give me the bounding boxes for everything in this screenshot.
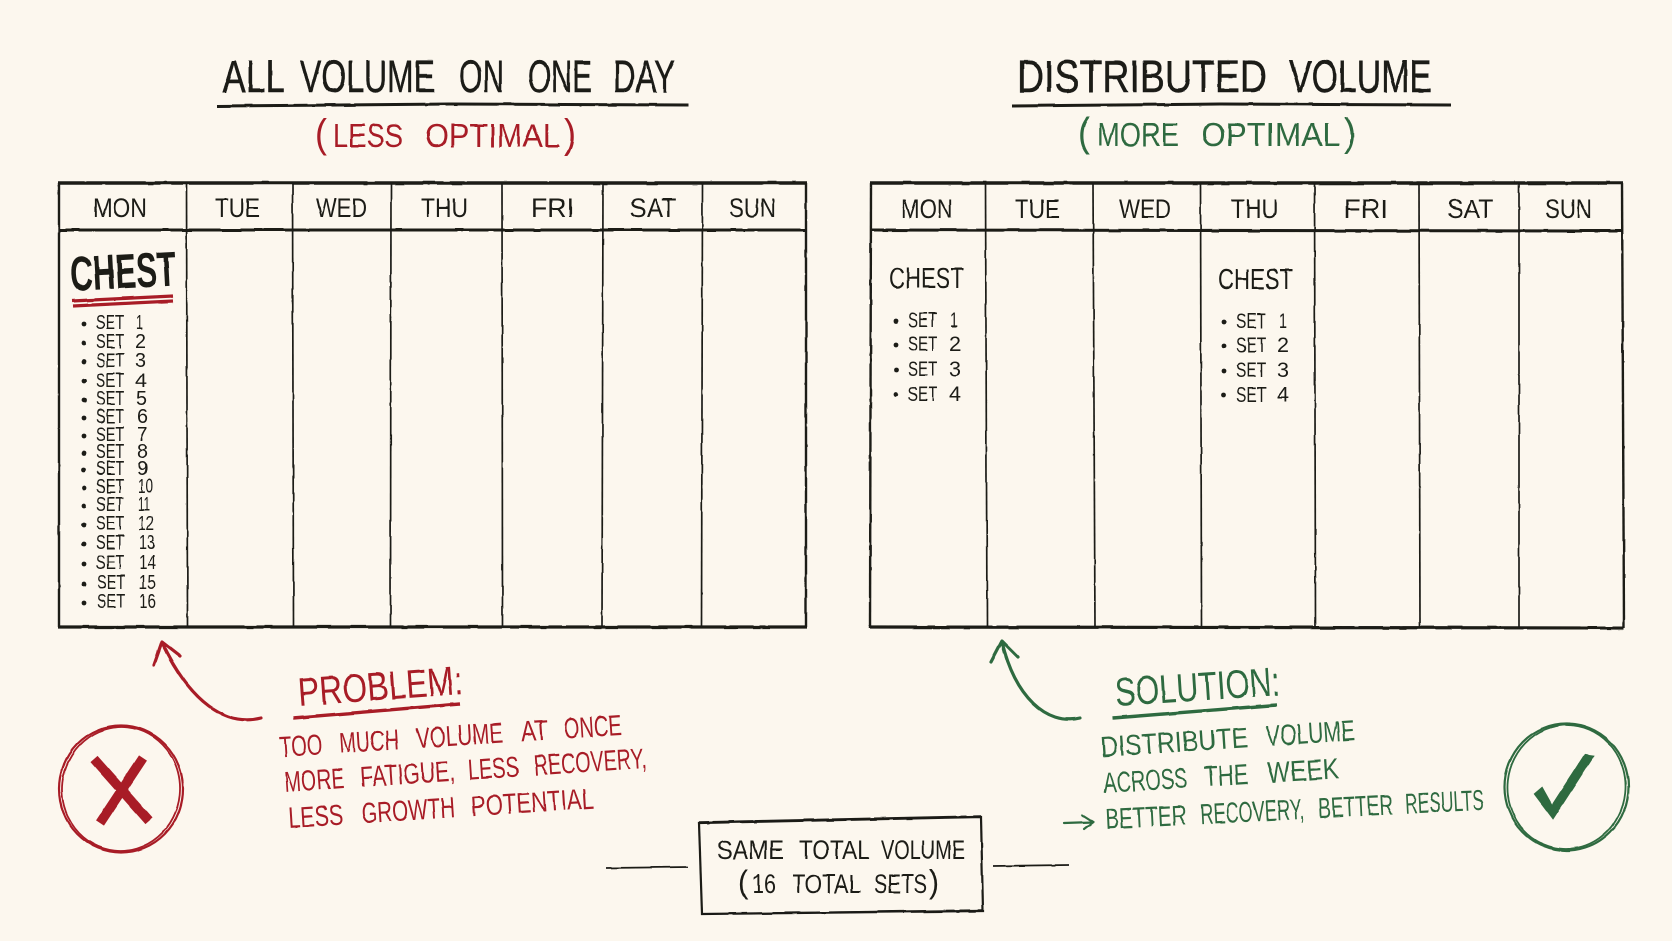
title: all volume on one day: ALL xyxy=(222,51,285,102)
problem text lines: ONCE xyxy=(563,710,623,746)
solution text lines: VOLUME xyxy=(1265,715,1356,753)
monday chest and sets xyxy=(889,263,964,406)
list: sets 1 to 16: 14 xyxy=(139,552,156,574)
list: sets 1 to 16: SET xyxy=(96,331,124,353)
problem text lines xyxy=(278,710,648,835)
callout box: same total volume: SETS xyxy=(874,869,927,899)
list: sets 1 to 16: 6 xyxy=(137,406,148,428)
callout: solution xyxy=(1099,660,1485,836)
day headers: SAT xyxy=(1447,194,1493,224)
thursday chest and sets: 2 xyxy=(1277,334,1289,357)
list: sets 1 to 16: 16 xyxy=(139,591,156,613)
list: sets 1 to 16: 10 xyxy=(138,476,153,498)
arrow: solution to monday column xyxy=(991,641,1080,719)
list: sets 1 to 16: SET xyxy=(96,552,124,574)
arrow: small result arrow xyxy=(1064,815,1093,829)
list: sets 1 to 16: SET xyxy=(96,312,124,334)
day headers: TUE xyxy=(215,193,260,223)
solution text lines: WEEK xyxy=(1266,753,1341,790)
list: sets 1 to 16: 1 xyxy=(136,312,143,334)
callout box: same total volume xyxy=(699,816,983,914)
callout box: same total volume: TOTAL xyxy=(799,835,870,865)
solution text lines: BETTER xyxy=(1105,800,1187,836)
day headers: MON xyxy=(93,193,147,223)
callout box: same total volume: ) xyxy=(929,864,939,900)
list: sets 1 to 16: SET xyxy=(96,513,124,535)
problem text lines: MUCH xyxy=(338,724,400,760)
thursday chest and sets: CHEST xyxy=(1218,264,1293,296)
icon: red cross in circle xyxy=(56,721,186,857)
weekly table: all volume on one day xyxy=(58,183,807,627)
day headers: SUN xyxy=(1545,194,1592,224)
thursday chest and sets: SET xyxy=(1236,310,1266,333)
solution text lines: RECOVERY, xyxy=(1200,794,1305,831)
monday chest and sets: CHEST xyxy=(889,263,964,295)
problem text lines: RECOVERY, xyxy=(533,743,648,782)
solution text lines: BETTER xyxy=(1317,789,1394,825)
subtitle: more optimal: OPTIMAL xyxy=(1201,116,1340,153)
subtitle: less optimal: ( xyxy=(315,112,328,156)
day headers: MON xyxy=(901,194,953,224)
day headers: SAT xyxy=(630,193,676,223)
thursday chest and sets: SET xyxy=(1236,384,1266,407)
title: distributed volume: DISTRIBUTED xyxy=(1017,51,1267,102)
thursday chest and sets: 1 xyxy=(1279,310,1287,333)
list: sets 1 to 16: SET xyxy=(96,350,124,372)
monday chest and sets: 2 xyxy=(949,333,961,356)
panel: distributed volume xyxy=(870,51,1624,628)
list: sets 1 to 16: SET xyxy=(96,441,124,463)
list: sets 1 to 16: SET xyxy=(96,494,124,516)
problem text lines: GROWTH xyxy=(360,792,456,830)
problem text lines: FATIGUE, xyxy=(359,756,456,794)
list: sets 1 to 16: 15 xyxy=(139,572,156,594)
list: sets 1 to 16: SET xyxy=(96,424,124,446)
day headers: THU xyxy=(421,193,468,223)
callout box: same total volume: 16 xyxy=(752,869,776,899)
monday chest and sets: SET xyxy=(908,358,937,381)
list: sets 1 to 16: 12 xyxy=(138,513,154,535)
subtitle: more optimal: ) xyxy=(1344,111,1356,155)
subtitle: less optimal: LESS xyxy=(333,117,403,154)
subtitle: more optimal: ( xyxy=(1078,111,1091,155)
solution heading: SOLUTION: xyxy=(1114,660,1281,715)
problem text lines: TOO xyxy=(278,729,323,764)
callout box: same total volume: TOTAL xyxy=(792,869,861,899)
list: sets 1 to 16: SET xyxy=(96,370,124,392)
monday chest and sets: 4 xyxy=(949,383,961,406)
monday chest and sets: 3 xyxy=(949,358,961,381)
title: all volume on one day: DAY xyxy=(613,51,675,102)
thursday chest and sets: SET xyxy=(1236,334,1266,357)
list: sets 1 to 16: 11 xyxy=(138,494,150,516)
day headers: WED xyxy=(1119,194,1171,224)
subtitle: less optimal: OPTIMAL xyxy=(425,117,560,154)
day headers: TUE xyxy=(1015,194,1060,224)
problem text lines: LESS xyxy=(467,751,520,787)
solution text lines xyxy=(1099,715,1485,836)
panel: all volume on one day xyxy=(58,51,807,627)
monday chest and sets: SET xyxy=(908,383,937,406)
title: distributed volume: VOLUME xyxy=(1289,51,1432,102)
problem text lines: LESS xyxy=(287,800,344,835)
list: sets 1 to 16: 5 xyxy=(136,388,147,410)
list: sets 1 to 16: SET xyxy=(96,388,124,410)
problem text lines: MORE xyxy=(283,763,345,799)
list: sets 1 to 16 xyxy=(82,312,156,613)
list: sets 1 to 16: 4 xyxy=(135,370,147,392)
subtitle: more optimal: MORE xyxy=(1097,116,1179,153)
list: sets 1 to 16: SET xyxy=(96,532,124,554)
callout box: same total volume: ( xyxy=(738,864,748,900)
solution text lines: DISTRIBUTE xyxy=(1099,722,1249,764)
list: sets 1 to 16: 13 xyxy=(139,532,155,554)
list: sets 1 to 16: 7 xyxy=(137,424,148,446)
subtitle: less optimal: ) xyxy=(564,112,576,156)
callout box: same total volume: VOLUME xyxy=(881,835,965,865)
icon: green check in circle xyxy=(1501,719,1632,855)
thursday chest and sets: 3 xyxy=(1277,359,1289,382)
thursday chest and sets xyxy=(1218,264,1293,407)
table grid xyxy=(870,183,1624,628)
list: sets 1 to 16: SET xyxy=(97,591,125,613)
list: sets 1 to 16: 2 xyxy=(135,331,146,353)
solution text lines: ACROSS xyxy=(1102,763,1188,800)
list: sets 1 to 16: SET xyxy=(96,476,124,498)
list: sets 1 to 16: 3 xyxy=(135,350,146,372)
title: all volume on one day: ONE xyxy=(528,51,592,102)
list: sets 1 to 16: SET xyxy=(96,406,124,428)
problem heading: PROBLEM: xyxy=(296,659,464,715)
thursday chest and sets: 4 xyxy=(1277,384,1289,407)
title: all volume on one day xyxy=(217,51,689,106)
monday chest and sets: SET xyxy=(908,309,937,332)
monday chest and sets: 1 xyxy=(950,309,958,332)
day headers: FRI xyxy=(531,193,574,223)
day headers: WED xyxy=(316,193,367,223)
table grid xyxy=(58,183,807,627)
problem text lines: AT xyxy=(520,715,550,748)
list: sets 1 to 16: 8 xyxy=(137,441,148,463)
callout box: same total volume: SAME xyxy=(717,835,784,865)
solution text lines: RESULTS xyxy=(1404,785,1485,821)
arrow: problem to monday column xyxy=(154,642,261,720)
day headers: THU xyxy=(1231,194,1278,224)
heavy chest heading: CHEST xyxy=(69,243,177,302)
title: all volume on one day: VOLUME xyxy=(300,51,435,102)
solution heading xyxy=(1113,660,1281,718)
title: distributed volume xyxy=(1012,51,1451,106)
day headers: FRI xyxy=(1344,194,1388,224)
problem text lines: VOLUME xyxy=(415,718,504,755)
list: sets 1 to 16: 9 xyxy=(137,458,148,480)
day headers: SUN xyxy=(729,193,776,223)
monday chest and sets: SET xyxy=(908,333,937,356)
list: sets 1 to 16: SET xyxy=(97,572,125,594)
callout: problem xyxy=(278,659,648,835)
weekly table: distributed volume xyxy=(870,183,1624,628)
problem text lines: POTENTIAL xyxy=(470,783,595,823)
title: all volume on one day: ON xyxy=(459,51,504,102)
list: sets 1 to 16: SET xyxy=(96,458,124,480)
heavy chest heading xyxy=(69,243,177,306)
thursday chest and sets: SET xyxy=(1236,359,1266,382)
solution text lines: THE xyxy=(1203,759,1249,794)
